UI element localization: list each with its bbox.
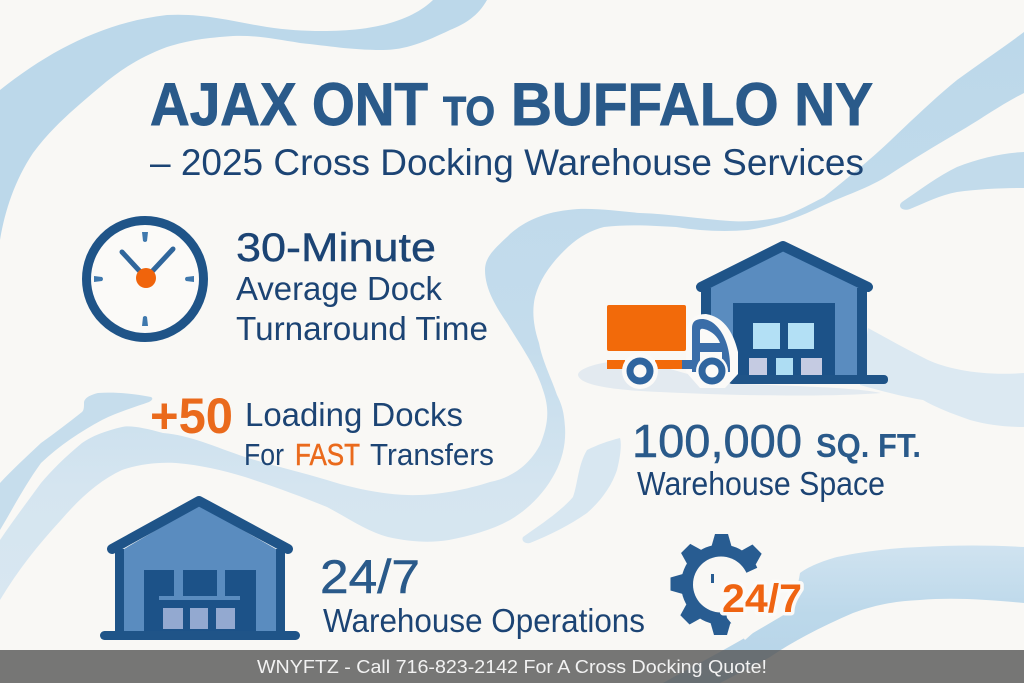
- warehouse body: [706, 247, 862, 378]
- swoosh: right pale band: [860, 328, 1024, 427]
- swoosh: bottom right band: [663, 546, 1024, 683]
- text: 30-minute dock turnaround: Average Dock: [236, 270, 442, 307]
- text: 100,000 sq ft: Warehouse Space: [637, 465, 885, 502]
- swoosh: top-left band: [0, 0, 487, 240]
- swoosh: small right sliver: [522, 438, 621, 543]
- icon: clock: [86, 220, 204, 338]
- title: TO: [443, 88, 495, 134]
- text: +50 loading docks: Transfers: [370, 437, 494, 472]
- text: 24/7 warehouse operations: 24/7: [320, 550, 420, 603]
- text: +50 loading docks: Loading Docks: [245, 396, 463, 433]
- text: 30-minute dock turnaround: 30-Minute: [236, 226, 436, 270]
- warehouse walls and roof: [701, 246, 868, 378]
- icon: gear with 24/7: [670, 534, 802, 640]
- warehouse base: [100, 631, 300, 640]
- warehouse base: [728, 375, 888, 384]
- text: 24/7 warehouse operations: Warehouse Operations: [323, 602, 645, 639]
- ground shadow: [578, 360, 881, 396]
- text: +50 loading docks: FAST: [295, 437, 360, 472]
- icon: warehouse: [100, 501, 300, 640]
- subtitle: – 2025 Cross Docking Warehouse Services: [150, 142, 864, 183]
- text: 100,000 sq ft: 100,000: [632, 415, 802, 467]
- text: 24/7 warehouse operations: [320, 550, 645, 639]
- warehouse door: [144, 570, 256, 632]
- warehouse door: [733, 303, 835, 376]
- text: 100,000 sq ft: SQ. FT.: [816, 427, 921, 464]
- text: +50 loading docks: [150, 388, 494, 472]
- swoosh: upper right sliver: [900, 152, 1024, 210]
- icon: warehouse with truck: [578, 246, 888, 396]
- title: [150, 71, 873, 138]
- swoosh: left small band: [0, 393, 152, 530]
- text: 100,000 sq ft: [632, 415, 921, 502]
- text: +50 loading docks: For: [244, 437, 284, 472]
- text: +50 loading docks: +50: [150, 388, 233, 444]
- footer bar: WNYFTZ - Call 716-823-2142 For A Cross Docking Quote!: [257, 657, 767, 677]
- text: 30-minute dock turnaround: Turnaround Time: [236, 310, 488, 347]
- icon: gear with 24/7: 24/7: [722, 577, 802, 621]
- text: 30-minute dock turnaround: [236, 226, 488, 347]
- truck: [607, 305, 738, 389]
- title: BUFFALO NY: [511, 71, 873, 138]
- title: AJAX ONT: [150, 71, 428, 138]
- footer bar: [0, 650, 1024, 683]
